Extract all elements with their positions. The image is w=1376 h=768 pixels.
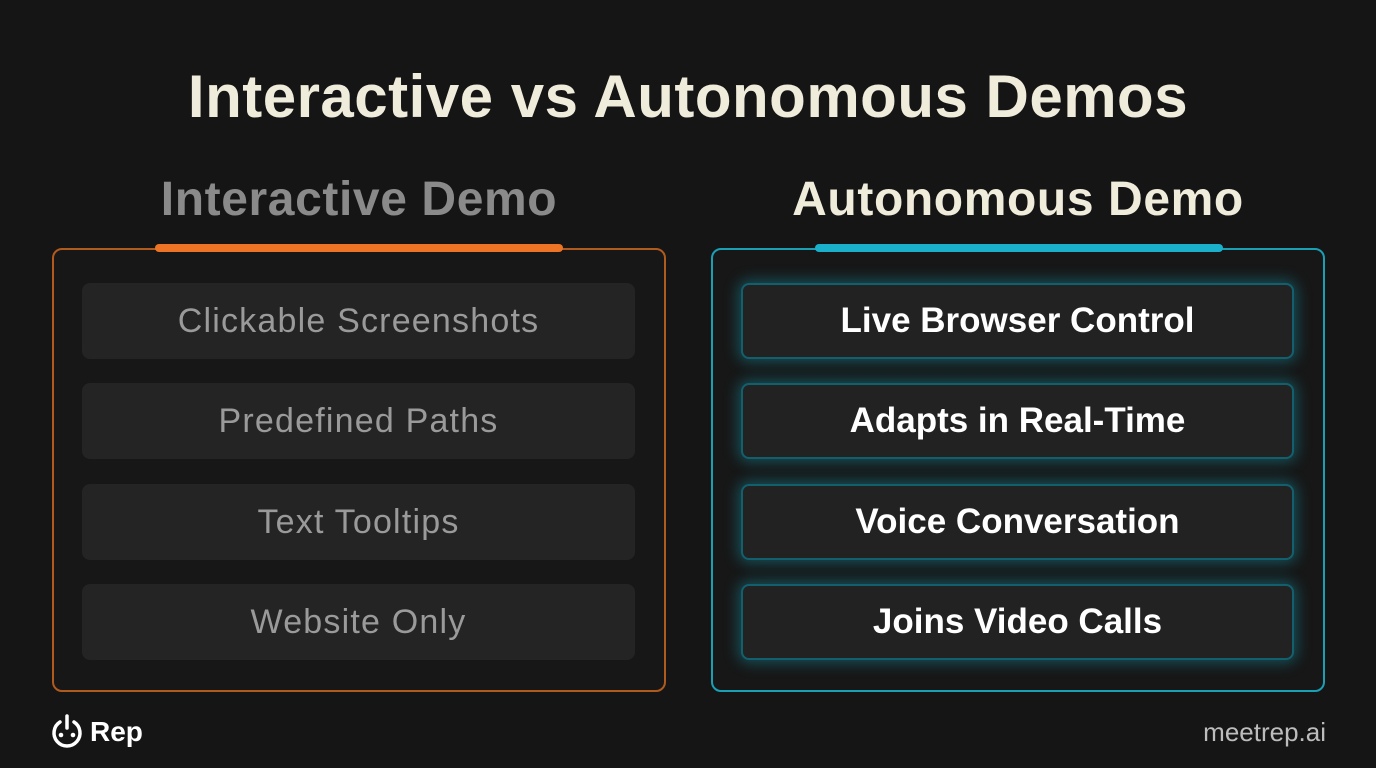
row: predefined paths: Predefined Paths — [218, 402, 499, 440]
row: website only: Website Only — [251, 602, 466, 640]
row: live browser control: Live Browser Control — [841, 301, 1194, 340]
row: adapts in real-time: Adapts in Real-Time — [850, 401, 1185, 440]
row: clickable screenshots: Clickable Screenshots — [178, 302, 539, 340]
heading: interactive: Interactive Demo — [161, 173, 557, 226]
row: live browser control — [741, 283, 1294, 359]
row: adapts in real-time — [741, 383, 1294, 459]
row: voice conversation: Voice Conversation — [855, 502, 1180, 541]
row: text tooltips: Text Tooltips — [257, 502, 460, 540]
logo: Rep: Rep — [90, 716, 143, 747]
row: voice conversation — [741, 484, 1294, 560]
heading: autonomous: Autonomous Demo — [792, 173, 1244, 226]
title: Interactive vs Autonomous Demos — [188, 63, 1188, 130]
row: joins video calls — [741, 584, 1294, 660]
footer url: meetrep.ai — [1203, 717, 1326, 747]
panel: interactive — [52, 248, 666, 692]
accent bar: orange — [155, 244, 563, 252]
accent bar: cyan — [815, 244, 1223, 252]
row: website only — [82, 584, 635, 660]
panel: autonomous — [711, 248, 1325, 692]
row: clickable screenshots — [82, 283, 635, 359]
logo: Rep — [52, 714, 143, 748]
row: joins video calls: Joins Video Calls — [873, 602, 1162, 641]
row: text tooltips — [82, 484, 635, 560]
row: predefined paths — [82, 383, 635, 459]
icon: power face — [52, 714, 82, 748]
